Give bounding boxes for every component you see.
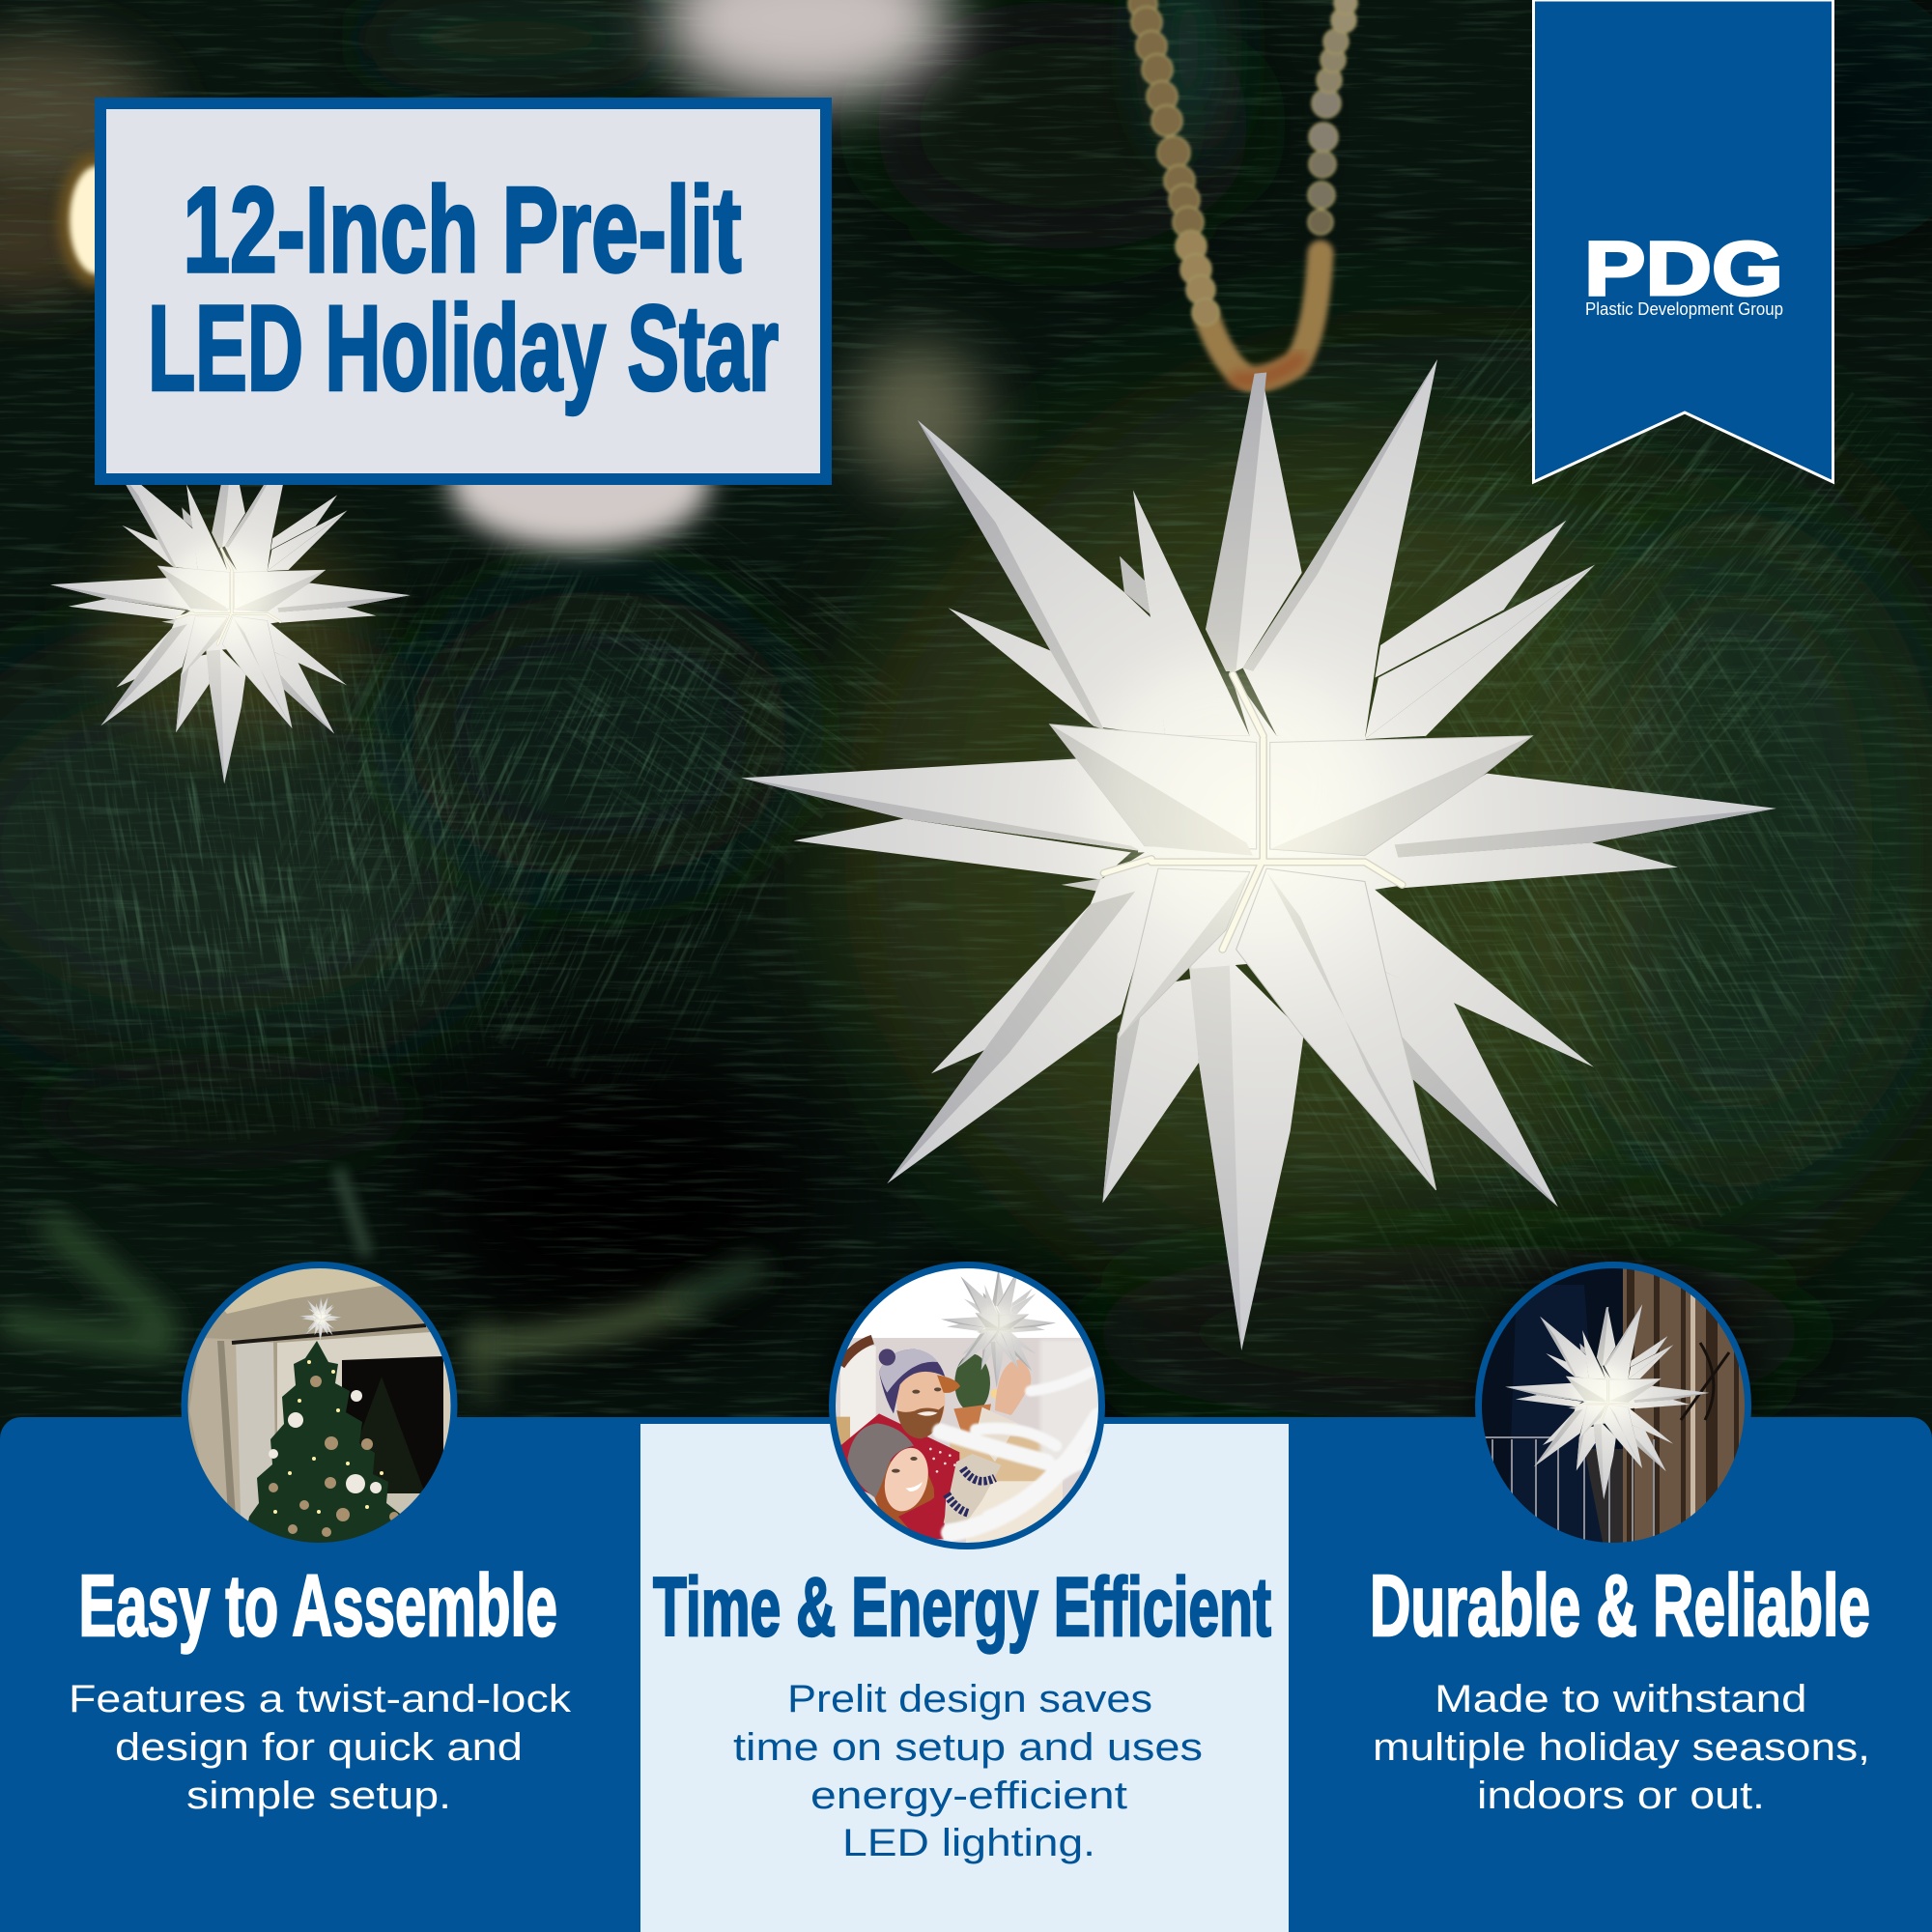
gold bead hanging cord [1128, 0, 1357, 380]
description: energy-efficient [810, 1775, 1127, 1817]
description: design for quick and [115, 1726, 523, 1769]
icon: star topper [300, 1297, 342, 1342]
description: Features a twist-and-lock [69, 1678, 572, 1720]
description: Made to withstand [1435, 1678, 1806, 1720]
background: blurred pine tree photo [0, 0, 1932, 1449]
description [69, 1678, 572, 1817]
heading: Time & Energy Efficient [653, 1561, 1271, 1654]
column: durable and reliable [1370, 1558, 1870, 1817]
description: multiple holiday seasons, [1373, 1726, 1870, 1769]
photo circle: star on porch at night [1478, 1264, 1748, 1547]
column: time and energy efficient [653, 1561, 1271, 1864]
column: easy to assemble [69, 1558, 572, 1817]
ribbon banner with PDG logo [1534, 0, 1833, 482]
photo circle: couple hanging star [831, 1265, 1101, 1546]
small white LED star, left [50, 439, 411, 783]
photo circle: tree with star topper [184, 1264, 457, 1551]
description: Prelit design saves [787, 1678, 1152, 1720]
title box [100, 103, 826, 479]
description [733, 1678, 1203, 1864]
centre highlighted column [640, 1424, 1289, 1932]
description [1373, 1678, 1870, 1817]
heading: Easy to Assemble [79, 1558, 557, 1655]
main white LED star [742, 359, 1776, 1350]
description: time on setup and uses [733, 1726, 1203, 1769]
logo tagline: Plastic Development Group [1585, 298, 1783, 319]
description: indoors or out. [1477, 1775, 1765, 1817]
description: simple setup. [186, 1775, 451, 1817]
bottom feature panel [0, 1417, 1932, 1932]
description: LED lighting. [842, 1822, 1095, 1864]
needle texture is decorative [0, 0, 1932, 1430]
title line 2: LED Holiday Star [148, 282, 779, 415]
logo wordmark: PDG [1584, 225, 1783, 311]
dark halos behind photo circles [822, 1250, 1758, 1551]
title line 1: 12-Inch Pre-lit [184, 163, 742, 298]
